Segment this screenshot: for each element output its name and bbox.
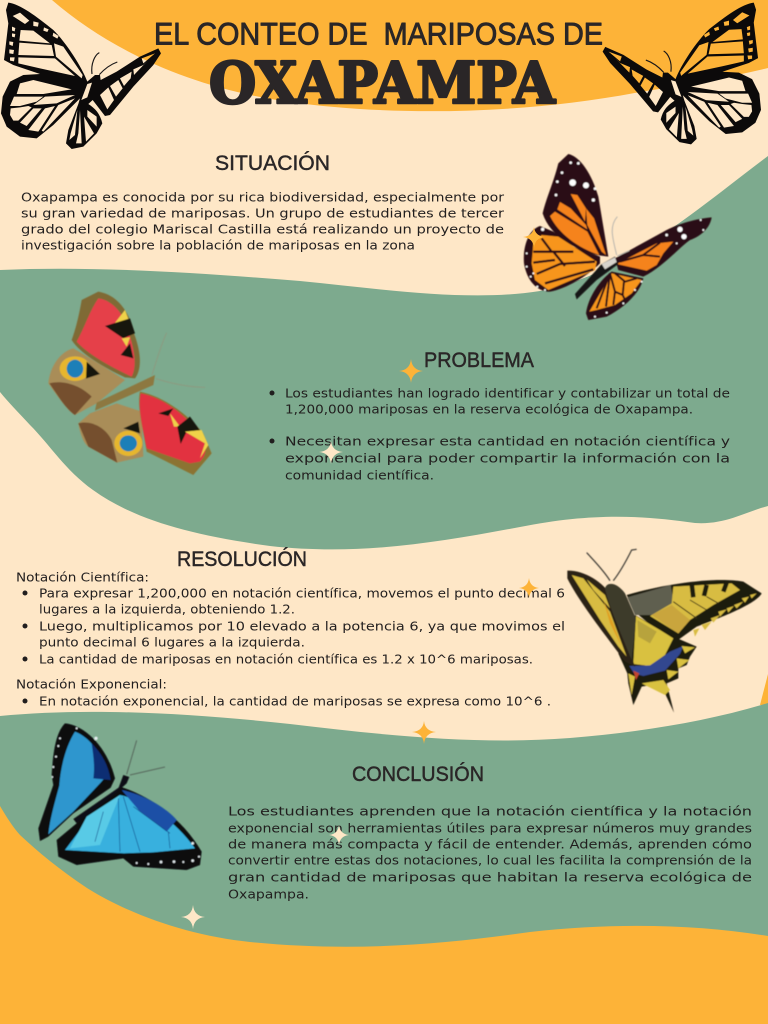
title line two: OXAPAMPA — [209, 50, 556, 117]
heading: situación: SITUACIÓN — [215, 150, 330, 175]
text block: resolución — [16, 570, 565, 708]
text block: resolución: Luego, multiplicamos por 10 elevado a la potencia 6, ya que movimos el — [39, 618, 565, 634]
icon: blue morpho butterfly — [38, 723, 202, 870]
text block: conclusión: gran cantidad de mariposas que habitan la reserva ecológica de — [228, 870, 752, 884]
title — [154, 16, 603, 117]
bottom orange block — [0, 806, 768, 1024]
text block: problema: comunidad científica. — [285, 468, 434, 482]
text block: resolución: punto decimal 6 lugares a la izquierda. — [39, 634, 305, 650]
text block: situación — [21, 190, 505, 252]
green wave: conclusion band — [0, 703, 768, 947]
text block: resolución: La cantidad de mariposas en notación científica es 1.2 x 10^6 mariposas. — [39, 652, 533, 666]
green wave: problem band — [0, 156, 768, 549]
text block: problema: 1,200,000 mariposas en la reserva ecológica de Oxapampa. — [285, 402, 693, 416]
icon: peacock butterfly — [48, 292, 212, 475]
icon: black and white butterfly right — [603, 3, 761, 144]
text block: conclusión: exponencial son herramientas útiles para expresar números muy grandes — [228, 820, 752, 836]
icon: monarch butterfly — [524, 154, 712, 320]
text block: resolución: Para expresar 1,200,000 en notación científica, movemos el punto decimal 6 — [39, 586, 565, 600]
text block: conclusión: Los estudiantes aprenden que la notación científica y la notación — [228, 804, 752, 818]
decorative stars — [181, 227, 545, 929]
text block: conclusión: convertir entre estas dos notaciones, lo cual les facilita la comprensión de la — [228, 852, 752, 868]
orange corner accent — [760, 674, 768, 705]
header orange wave — [52, 0, 768, 111]
text block: situación: su gran variedad de mariposas. Un grupo de estudiantes de tercer — [21, 206, 505, 220]
text block: resolución: Notación Exponencial: — [16, 676, 167, 692]
text block: problema: Los estudiantes han logrado identificar y contabilizar un total de — [285, 386, 730, 400]
icon: swallowtail butterfly — [567, 549, 762, 713]
text block: problema: Necesitan expresar esta cantidad en notación científica y — [285, 434, 730, 448]
text block: problema — [270, 386, 730, 482]
text block: conclusión — [228, 804, 752, 902]
text block: resolución: lugares a la izquierda, obteniendo 1.2. — [39, 602, 295, 616]
text block: resolución: En notación exponencial, la cantidad de mariposas se expresa como 10^6 . — [39, 694, 551, 708]
text block: situación: grado del colegio Mariscal Castilla está realizando un proyecto de — [21, 222, 504, 236]
text block: problema: exponencial para poder compartir la información con la — [285, 450, 730, 466]
heading: problema: PROBLEMA — [424, 348, 535, 372]
heading: resolución: RESOLUCIÓN — [177, 546, 307, 571]
title line one: EL CONTEO DE MARIPOSAS DE — [154, 16, 603, 52]
heading: conclusión: CONCLUSIÓN — [352, 761, 484, 786]
text block: conclusión: de manera más compacta y fácil de entender. Además, aprenden cómo — [228, 836, 752, 852]
text block: situación: investigación sobre la población de mariposas en la zona — [21, 238, 415, 252]
icon: black and white butterfly left — [1, 3, 161, 149]
text block: conclusión: Oxapampa. — [228, 886, 309, 902]
text block: resolución: Notación Científica: — [16, 570, 149, 584]
text block: situación: Oxapampa es conocida por su rica biodiversidad, especialmente por — [21, 190, 505, 204]
